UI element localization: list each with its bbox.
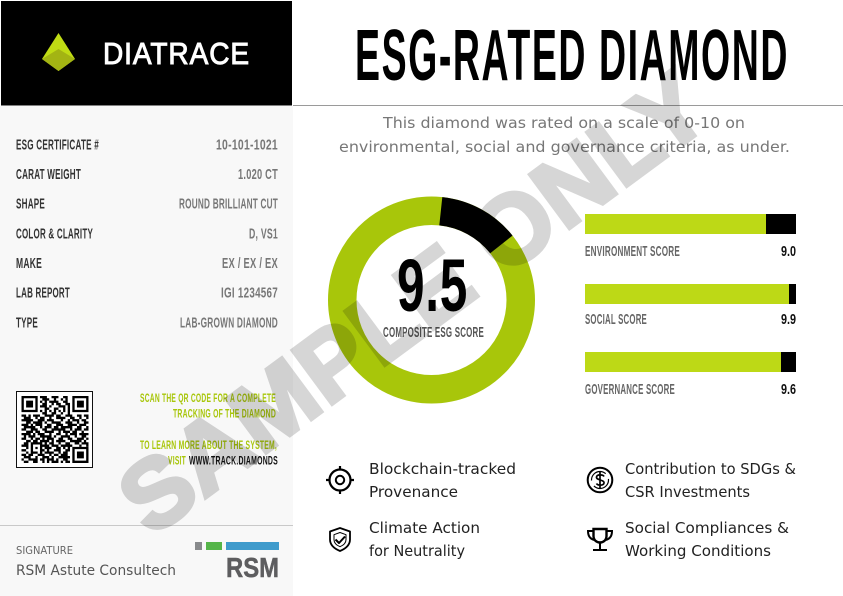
feature: social compliances bbox=[625, 519, 789, 560]
feature: social compliances: Working Conditions bbox=[625, 542, 771, 560]
QR instructions text: VISIT bbox=[168, 456, 186, 468]
bar: social score: SOCIAL SCORE bbox=[585, 311, 647, 328]
header: black logo block bbox=[1, 1, 292, 106]
certificate detail labels: TYPE bbox=[16, 314, 38, 331]
watermark: sample only: SAMPLE ONLY bbox=[99, 50, 728, 555]
logo: RSM bbox=[195, 542, 279, 583]
icon: trophy bbox=[588, 529, 612, 550]
certificate detail labels: COLOR & CLARITY bbox=[16, 225, 93, 242]
bar: governance score bbox=[585, 352, 796, 398]
certificate detail labels: LAB REPORT bbox=[16, 285, 70, 302]
logo: RSM: RSM bbox=[226, 552, 279, 583]
composite score label: COMPOSITE ESG SCORE bbox=[383, 324, 484, 341]
certificate detail values: EX / EX / EX bbox=[222, 255, 278, 272]
QR instructions text: TO LEARN MORE ABOUT THE SYSTEM, bbox=[140, 440, 277, 452]
bar: social score: 9.9 bbox=[781, 311, 796, 328]
subtitle text: environmental, social and governance criteria, as under. bbox=[339, 138, 790, 156]
QR instructions text: TRACKING OF THE DIAMOND bbox=[173, 408, 276, 420]
signature block bbox=[16, 545, 176, 579]
feature: social compliances: Social Compliances & bbox=[625, 519, 789, 537]
icon: shield check bbox=[330, 528, 350, 551]
feature: climate action: Climate Action bbox=[369, 519, 480, 537]
signature block: SIGNATURE bbox=[16, 545, 73, 557]
bar: social score bbox=[585, 284, 796, 328]
bar: environment score: 9.0 bbox=[781, 243, 796, 260]
panel: left certificate details bbox=[0, 106, 293, 596]
donut chart: composite score bbox=[342, 197, 521, 389]
icon: dollar coin bbox=[588, 468, 612, 492]
subtitle text: This diamond was rated on a scale of 0-10 on bbox=[382, 114, 745, 132]
certificate detail labels: MAKE bbox=[16, 255, 42, 272]
certificate detail labels: ESG CERTIFICATE # bbox=[16, 136, 99, 153]
feature: blockchain provenance: Blockchain-tracked bbox=[369, 460, 516, 478]
feature: blockchain provenance bbox=[369, 460, 516, 501]
feature: SDG contribution: Contribution to SDGs & bbox=[625, 460, 796, 478]
certificate detail values: LAB-GROWN DIAMOND bbox=[180, 314, 278, 331]
QR instructions text: SCAN THE QR CODE FOR A COMPLETE bbox=[140, 393, 276, 405]
certificate detail values bbox=[179, 136, 278, 331]
feature: blockchain provenance: Provenance bbox=[369, 483, 458, 501]
icon: target bbox=[326, 466, 354, 494]
feature: climate action bbox=[369, 519, 480, 560]
composite score value: 9.5 bbox=[397, 244, 468, 327]
certificate detail values: IGI 1234567 bbox=[221, 285, 278, 302]
icon: diatrace diamond bbox=[42, 33, 75, 71]
QR instructions text: WWW.TRACK.DIAMONDS bbox=[189, 456, 278, 468]
bar: governance score: 9.6 bbox=[781, 381, 796, 398]
certificate detail values: 1.020 CT bbox=[238, 166, 278, 183]
certificate detail values: D, VS1 bbox=[249, 225, 278, 242]
bar: environment score bbox=[585, 214, 796, 260]
certificate detail values: ROUND BRILLIANT CUT bbox=[179, 196, 278, 213]
certificate detail labels bbox=[16, 136, 99, 331]
feature: climate action: for Neutrality bbox=[369, 542, 465, 560]
bar: governance score: GOVERNANCE SCORE bbox=[585, 381, 675, 398]
feature: SDG contribution: CSR Investments bbox=[625, 483, 750, 501]
certificate detail values: 10-101-1021 bbox=[216, 136, 278, 153]
logo wordmark: DIATRACE bbox=[103, 36, 250, 71]
subtitle text bbox=[339, 114, 790, 156]
signature block: RSM Astute Consultech bbox=[16, 563, 176, 579]
certificate detail labels: SHAPE bbox=[16, 196, 45, 213]
certificate detail labels: CARAT WEIGHT bbox=[16, 166, 81, 183]
QR code bbox=[16, 392, 92, 468]
QR instructions text bbox=[140, 393, 278, 468]
feature: SDG contribution bbox=[625, 460, 796, 501]
bar: environment score: ENVIRONMENT SCORE bbox=[585, 243, 680, 260]
